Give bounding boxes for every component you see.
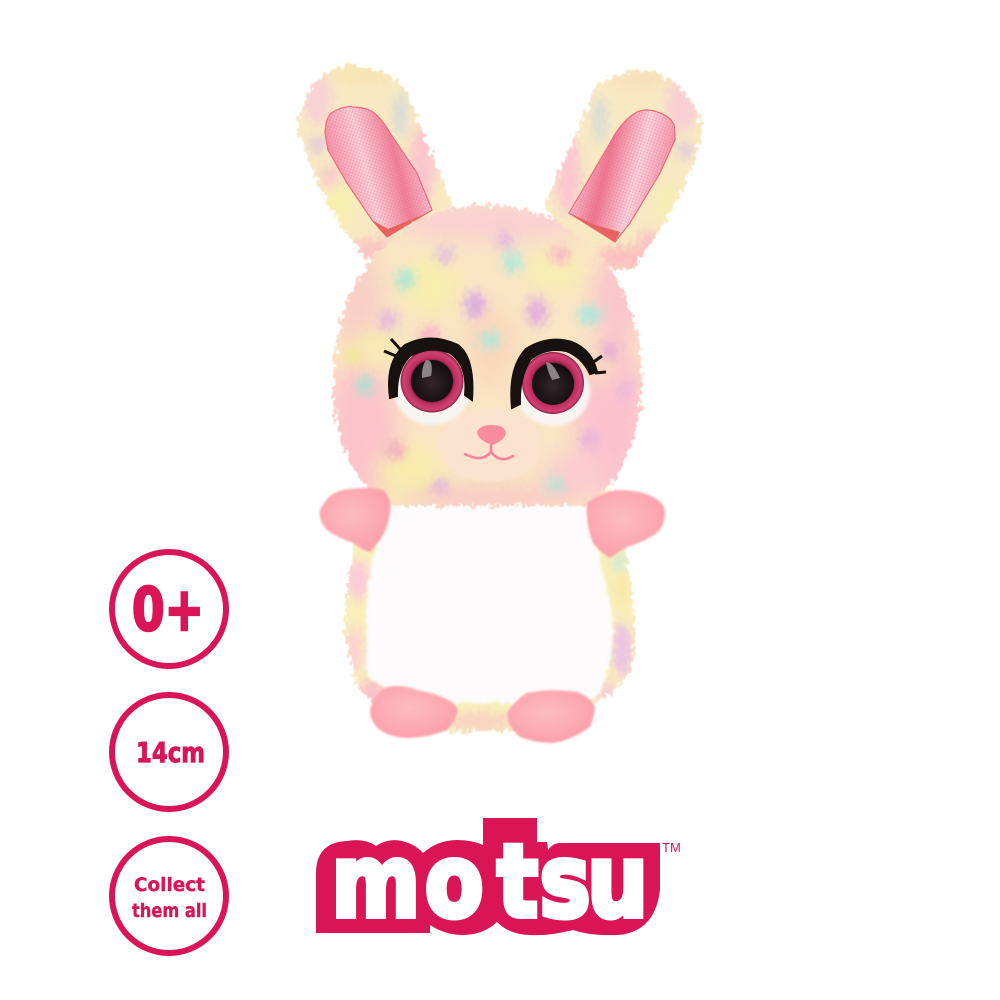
right foot bbox=[507, 690, 595, 743]
inner ear satin left bbox=[325, 107, 432, 237]
right ear bbox=[540, 65, 710, 275]
badge: size 14cm: 14cm bbox=[136, 736, 205, 769]
badge: age 0+ bbox=[112, 552, 226, 666]
nose and mouth bbox=[465, 425, 513, 459]
badge: collect them all: Collect bbox=[134, 874, 205, 896]
badge: collect them all: them all bbox=[132, 900, 207, 922]
badge: collect them all bbox=[112, 839, 226, 953]
badge: age 0+: 0+ bbox=[132, 575, 204, 645]
muzzle bbox=[438, 408, 542, 482]
left foot bbox=[370, 686, 458, 738]
head fur bbox=[320, 195, 650, 515]
trademark: TM bbox=[662, 840, 681, 855]
left ear bbox=[292, 62, 453, 262]
body fur bbox=[340, 480, 640, 740]
right eye bbox=[511, 340, 606, 426]
white belly bbox=[366, 487, 613, 705]
inner ear satin right bbox=[569, 110, 675, 242]
left eye bbox=[384, 338, 472, 425]
right arm bbox=[587, 490, 665, 558]
logo: motsu: motsu bbox=[332, 823, 648, 940]
badge: size 14cm bbox=[112, 695, 226, 809]
left arm bbox=[320, 488, 390, 552]
product photo: plush bunny bbox=[290, 60, 710, 743]
